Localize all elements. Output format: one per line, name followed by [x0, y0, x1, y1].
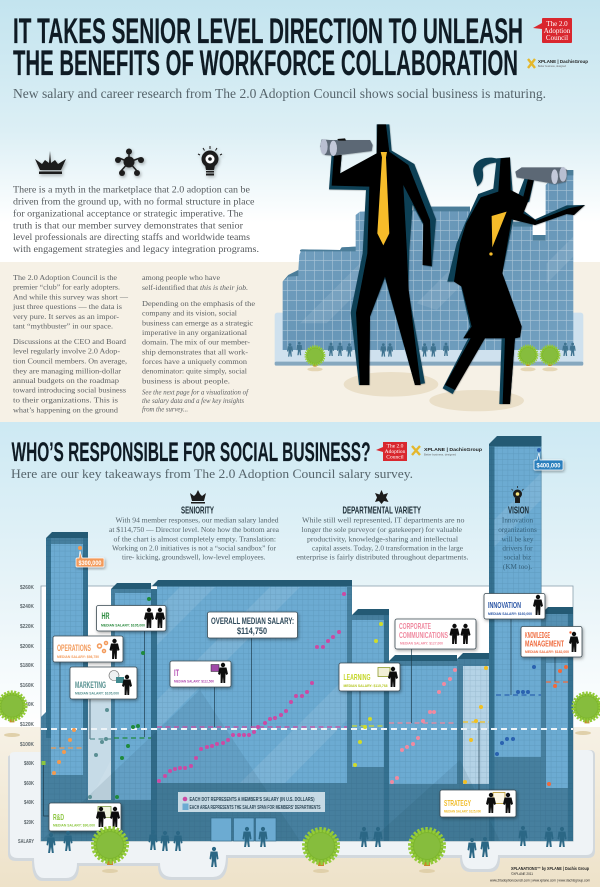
trees on platform: [306, 346, 559, 371]
axis labels: $120K: [20, 722, 34, 728]
text block: left column: And while this survey was short —: [13, 292, 129, 301]
logo: Xplane Dachis Group: Better business, designed: [538, 64, 567, 68]
text block: right column: domain. The mix of our member-: [142, 338, 251, 347]
text: vision body: (KM too).: [503, 563, 532, 571]
callout: innovation: MEDIAN SALARY: $160,000: [488, 611, 533, 616]
text: seniority body: With 94 member responses, our median salary landed: [116, 517, 279, 525]
text: seniority body: Working on 2.0 initiatives is not a “social sandbox” for: [112, 544, 277, 552]
ground shadows: [344, 372, 438, 397]
callout: operations: OPERATIONS: [57, 643, 91, 653]
logo: The 2.0 Adoption Council small: The 2.0: [387, 444, 404, 450]
dark side strips: [46, 538, 51, 738]
logo: The 2.0 Adoption Council small: Council: [386, 454, 404, 460]
text block: right column: company and its vision, social: [142, 309, 237, 318]
text block: right column: denominator: quite simply, social: [142, 367, 247, 376]
axis labels: $80K: [24, 761, 34, 767]
text block: right column: self-identified that this is their job.: [142, 283, 248, 292]
text block: right column: See the next page for a visualization of: [142, 390, 249, 396]
text block: left column: annual budgets on the roadmap: [13, 376, 119, 385]
text block: right column: Depending on the emphasis of the: [142, 299, 256, 308]
callout: IT: MEDIAN SALARY: $112,500: [174, 678, 215, 684]
logo: Xplane small: XPLANE | DachisGroup: [424, 447, 482, 453]
doors: [211, 818, 276, 841]
callout: $300,000: $300,000: [78, 561, 102, 567]
axis labels: $140K: [20, 702, 34, 708]
text: vision body: social biz: [504, 554, 531, 562]
pale panel between columns: [88, 700, 111, 800]
median leader lines: [44, 619, 555, 816]
light salary span areas: [51, 447, 568, 800]
callout: knowledge management: MANAGEMENT: [525, 638, 565, 648]
text: vision body: Innovation: [502, 517, 533, 525]
logo: The 2.0 Adoption Council: Adoption: [544, 27, 571, 35]
logo: Xplane small: [412, 446, 482, 456]
dots: marketing: [88, 708, 109, 799]
callout: operations: MEDIAN SALARY: $98,750: [57, 654, 100, 659]
text: seniority body: [109, 517, 280, 562]
footer credits: www.20adoptioncouncil.com | www.xplane.com | www.dachisgroup.com: [490, 878, 590, 882]
icon: crown small: [190, 490, 206, 504]
dots: operations: [52, 546, 82, 775]
text block: intro myth paragraph: with engagement strategies and legacy integration programs.: [13, 244, 259, 255]
small people on platform: [287, 342, 576, 357]
footer credits: [490, 866, 590, 882]
callout: corporate communications: [395, 619, 476, 649]
text block: right column: business can emerge as a strategic: [142, 318, 254, 327]
text block: left column: level regularly involve 2.0 Adop-: [13, 347, 121, 356]
logo: Xplane small: Better business, designed: [424, 452, 456, 456]
plot frame: [41, 586, 573, 841]
dot: R&D: [42, 761, 46, 765]
text block: intro myth paragraph: driven from the ground up, with no formal structure in place: [13, 196, 254, 208]
axis labels: $160K: [20, 683, 34, 689]
legend: EACH AREA REPRESENTS THE SALARY SPAN FOR MEMBERS’ DEPARTMENTS: [190, 805, 321, 811]
callout: overall median salary: $114,750: [237, 626, 267, 637]
callout: marketing: [70, 667, 137, 699]
callout: corporate communications: MEDIAN SALARY: $127,000: [400, 640, 444, 646]
departmental variety block: [296, 490, 469, 562]
dots: innovation: [495, 448, 541, 756]
text block: right column: imperative in any organizational: [142, 328, 247, 337]
callout: operations: [53, 636, 123, 662]
axis labels: SALARY: [18, 839, 34, 845]
grid overlay: [41, 446, 573, 841]
trees around the chart: [0, 692, 600, 873]
text: departmental body: longer the sole purveyor (or gatekeeper) for valuable: [302, 526, 462, 534]
text block: right column: among people who have: [142, 273, 221, 282]
text: seniority body: of the chart is almost completely empty. Translation:: [114, 535, 276, 543]
text block: right column: the salary data and a few key insights: [142, 398, 244, 405]
axis labels: $20K: [24, 820, 34, 826]
heading: seniority: SENIORITY: [181, 504, 214, 516]
callout: innovation: INNOVATION: [488, 600, 521, 610]
callout: $300,000: [76, 551, 104, 567]
logo: Xplane Dachis Group: XPLANE | DachisGroup: [538, 59, 588, 64]
callout: overall median salary: [208, 612, 298, 638]
text block: left column: very pure. It serves as an impor-: [13, 312, 120, 321]
callout: HR: [96, 606, 166, 631]
callout: knowledge management: KNOWLEDGE: [525, 630, 550, 640]
text: departmental body: capital assets. Today, 2.0 transformation in the large: [312, 544, 463, 552]
icon: bulb small: [512, 486, 524, 503]
roof caps: [46, 436, 573, 661]
text: vision body: drivers for: [502, 544, 533, 552]
text block: left column: premier “club” for early adopters.: [13, 283, 120, 292]
callout: IT: [170, 661, 231, 687]
callout: learning: LEARNING: [344, 672, 371, 682]
callout: IT: IT: [174, 668, 179, 678]
subtitle: New salary and career research from The 2.0 Adoption Council shows social business is maturing.: [13, 86, 546, 101]
callout: R&D: MEDIAN SALARY: $90,000: [53, 822, 96, 828]
text: vision body: will be key: [502, 535, 534, 543]
callout: learning: MEDIAN SALARY: $115,768: [344, 683, 388, 688]
people silhouettes along the base: [46, 826, 566, 867]
diagonal reflections: [90, 473, 541, 800]
callout: HR: MEDIAN SALARY: $105,000: [101, 622, 146, 628]
callout: overall median salary: OVERALL MEDIAN SALARY:: [211, 616, 294, 627]
callout: corporate communications: COMMUNICATIONS: [399, 630, 448, 640]
text: vision body: organizations: [498, 526, 537, 534]
text block: right column: forces have a uniquely common: [142, 357, 247, 366]
logo: The 2.0 Adoption Council small: [376, 442, 407, 461]
logo: The 2.0 Adoption Council small: Adoption: [385, 449, 406, 455]
text block: left column: Discussions at the CEO and Board: [13, 337, 126, 346]
icon: light bulb: [198, 146, 222, 176]
text block: left column: toward introducing social business: [13, 386, 126, 395]
woman: [443, 157, 585, 404]
text block: left column: The 2.0 Adoption Council is the: [13, 273, 118, 282]
text: vision body: [498, 517, 537, 571]
illustration: building and two figures with binoculars: [275, 124, 585, 411]
legend: EACH DOT REPRESENTS A MEMBER’S SALARY (IN U.S. DOLLARS): [190, 797, 315, 803]
text: departmental body: enterprise is fairly distributed throughout departments.: [296, 554, 469, 562]
callout: marketing: MEDIAN SALARY: $105,000: [75, 690, 120, 696]
callout: $400,000: [534, 453, 563, 470]
icon: network small: [375, 490, 388, 504]
subheading: Here are our key takeaways from The 2.0 Adoption Council salary survey.: [11, 466, 413, 481]
text: departmental body: [296, 517, 469, 562]
axis labels: $60K: [24, 781, 34, 787]
callout: knowledge management: MEDIAN SALARY: $182,000: [525, 649, 570, 654]
text block: intro myth paragraph: There is a myth in the marketplace that 2.0 adoption can be: [13, 184, 250, 196]
text: departmental body: While still well represented, IT departments are no: [302, 517, 465, 525]
footer credits: ©XPLANE 2011: [511, 872, 533, 876]
heading: departmental variety: DEPARTMENTAL VARIETY: [342, 504, 421, 516]
vision block: [498, 486, 537, 571]
ground: platform: [8, 750, 595, 881]
text block: left column: they are managing million-dollar: [13, 366, 122, 375]
text: departmental body: productivity, knowledge-sharing and intellectual: [307, 535, 458, 543]
text block: left column: tant “mythbuster” in our space.: [13, 322, 113, 330]
callout: innovation: [484, 594, 545, 619]
background: lower sand: [0, 727, 600, 887]
seniority block: [109, 490, 280, 562]
logo: The 2.0 Adoption Council: Council: [546, 34, 568, 42]
logo: The 2.0 Adoption Council: The 2.0: [546, 20, 568, 28]
icon: crown: [35, 151, 66, 174]
logo: The 2.0 Adoption Council: [533, 18, 572, 43]
dots: learning: [353, 622, 383, 767]
text block: intro myth paragraph: [13, 184, 259, 255]
platform: [275, 313, 583, 365]
dots: HR: [115, 597, 151, 799]
heading: vision: VISION: [508, 504, 529, 516]
text block: right column: business is about people.: [142, 376, 230, 385]
legend: [178, 792, 325, 812]
axis labels: [18, 585, 34, 845]
callout: knowledge management: [521, 626, 582, 657]
callout: strategy: MEDIAN SALARY: $125,000: [444, 808, 482, 814]
text block: right column: ship demonstrates that all work-: [142, 347, 249, 356]
man: [320, 124, 436, 385]
title: [13, 11, 523, 83]
callout: R&D: [49, 803, 121, 831]
overall median dashed line: [41, 728, 573, 730]
dots: knowledge management: [547, 665, 568, 786]
dots: IT: [157, 592, 346, 783]
chart: buildings salary spans: [41, 436, 573, 841]
background: upper sand: [0, 262, 600, 422]
icon: network: [115, 148, 144, 176]
callout: $400,000: $400,000: [536, 462, 561, 470]
axis labels: $40K: [24, 800, 34, 806]
dots: corporate communications: [390, 668, 457, 784]
background: upper sky: [0, 0, 600, 262]
text block: left column: what’s happening on the ground: [13, 405, 118, 414]
text block: left column: just three questions — the data is: [12, 302, 122, 311]
callout: corporate communications: CORPORATE: [399, 621, 431, 631]
callout: HR: HR: [102, 611, 110, 621]
callout: strategy: STRATEGY: [444, 798, 471, 808]
axis labels: $180K: [20, 663, 34, 669]
axis labels: $240K: [20, 604, 34, 610]
axis labels: $200K: [20, 644, 34, 650]
axis labels: $100K: [20, 742, 34, 748]
text block: left column: [12, 273, 129, 414]
text: seniority body: tire- kicking, groundswell, low-level employees.: [122, 554, 266, 562]
text block: right column: [142, 273, 256, 414]
logo: Xplane Dachis Group: [528, 59, 588, 68]
text block: left column: tion Council members. On average,: [13, 356, 127, 365]
dark base: [41, 446, 573, 841]
callout: strategy: [440, 790, 516, 817]
text block: intro myth paragraph: level professionals are directing staffs and worldwide teams: [13, 232, 250, 243]
dots: strategy: [463, 666, 488, 784]
text: seniority body: at $114,750 — Director level. Note how the bottom area: [109, 526, 280, 534]
axis labels: $220K: [20, 624, 34, 630]
text block: intro myth paragraph: truth is that our member survey demonstrates that senior: [13, 220, 244, 231]
median dashed lines: [51, 682, 568, 748]
background: lower sky: [0, 422, 600, 728]
axis labels: $260K: [20, 585, 34, 591]
building: [283, 170, 573, 350]
callout: R&D: R&D: [53, 812, 64, 822]
text block: left column: to their organizations. This is: [13, 395, 118, 404]
callout: marketing: MARKETING: [75, 680, 106, 690]
text block: intro myth paragraph: for organizational acceptance or strategic imperative. The: [13, 208, 243, 220]
text block: right column: from the survey...: [142, 407, 188, 414]
callout: learning: [339, 663, 400, 691]
